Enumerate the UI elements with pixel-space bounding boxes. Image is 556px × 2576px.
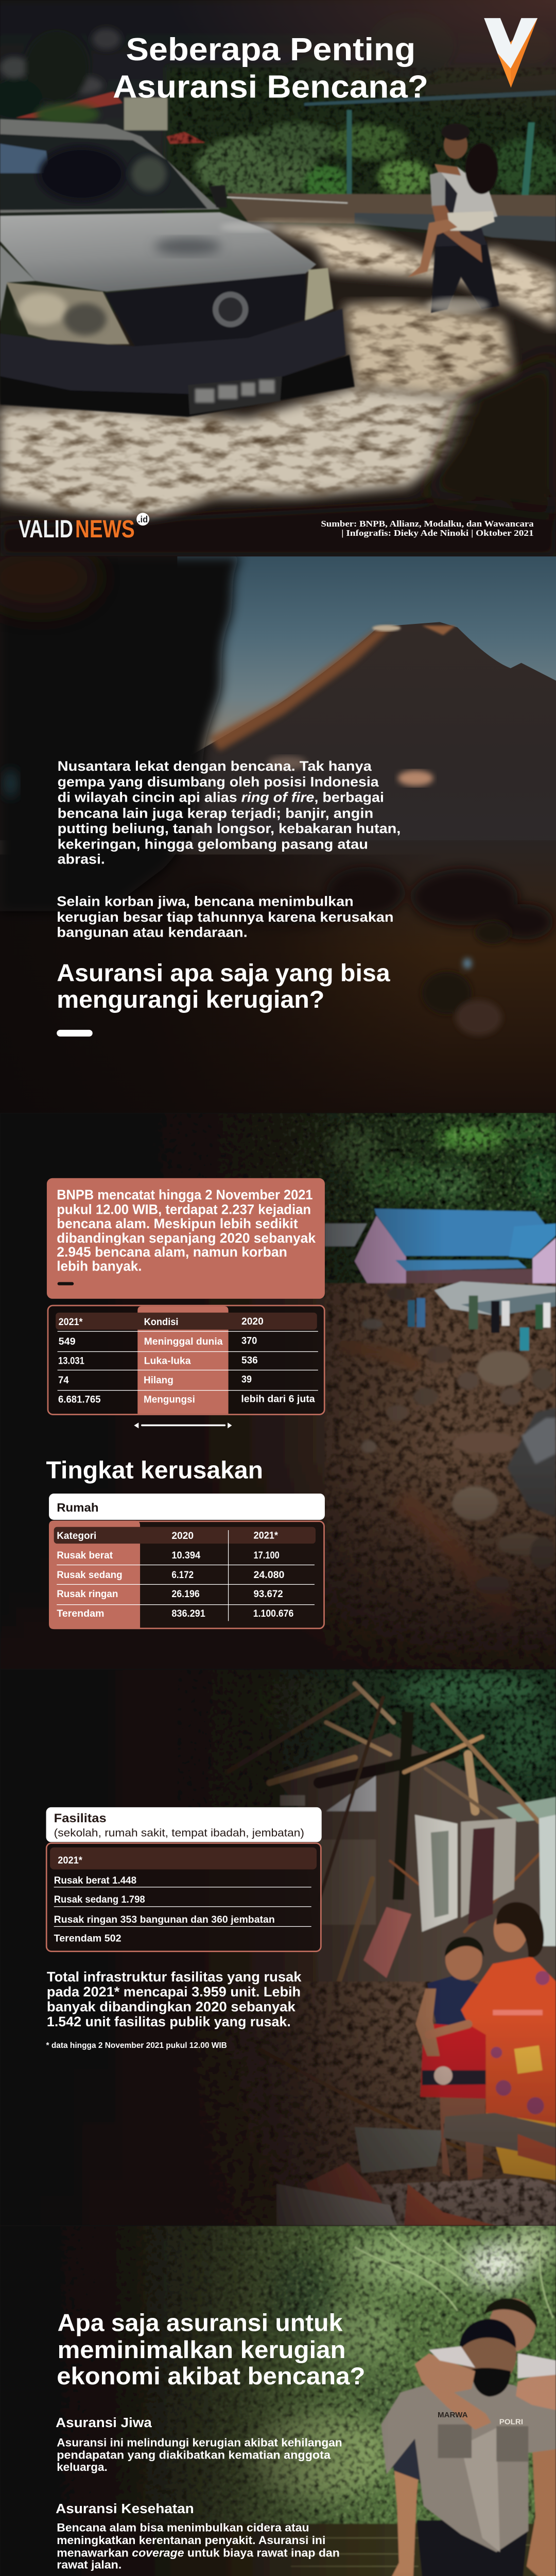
logo: VALIDNEWS.id: NEWS [75, 515, 135, 543]
photo: landslide village [0, 1113, 556, 1669]
heading: question: Asuransi apa saja yang bisa [57, 959, 391, 986]
table: damaged houses: Rusak sedang [57, 1570, 123, 1581]
table: damaged houses: 26.196 [171, 1589, 200, 1600]
intro paragraph 1: putting beliung, tanah longsor, kebakaran hutan, [58, 820, 401, 836]
table: casualties: Hilang [144, 1375, 173, 1386]
item: Asuransi Kesehatan [56, 2501, 340, 2571]
callout: BNPB summary: BNPB mencatat hingga 2 November 2021 [57, 1187, 312, 1202]
heading: insurance question [57, 2310, 365, 2389]
panel: volcano intro [0, 556, 556, 1113]
table: casualties: Meninggal dunia [144, 1336, 223, 1347]
heading: Tingkat kerusakan: Tingkat kerusakan [46, 1456, 263, 1483]
item: Asuransi Kesehatan: Bencana alam bisa menimbulkan cidera atau [57, 2521, 309, 2534]
table: damaged houses: 2021* [253, 1531, 278, 1541]
panel: damaged facilities [45, 1669, 556, 2226]
table: damaged facilities: Rusak ringan 353 bangunan dan 360 jembatan [54, 1914, 275, 1925]
item: Asuransi Kesehatan: Asuransi Kesehatan [56, 2501, 194, 2516]
photo: pickup truck [0, 119, 355, 417]
table: casualties: 13.031 [58, 1356, 84, 1367]
intro paragraph 2: Selain korban jiwa, bencana menimbulkan [57, 893, 354, 909]
item: Asuransi Jiwa: Asuransi Jiwa [56, 2415, 152, 2430]
photo: man carrying a child through floodwater [408, 124, 499, 313]
source credit: Sumber: BNPB, Allianz, Modalku, dan Wawancara [321, 519, 534, 529]
photo: policeman carrying a child through flood [0, 2226, 556, 2576]
table: damaged houses: 93.672 [253, 1589, 283, 1600]
heading: question [57, 959, 391, 1013]
text: total facilities: banyak dibandingkan 2020 sebanyak [47, 1998, 296, 2014]
callout: BNPB summary: lebih banyak. [57, 1258, 142, 1274]
accent bar [57, 1030, 93, 1037]
table: damaged houses: Kategori [57, 1531, 96, 1541]
item: Asuransi Jiwa: pendapatan yang diakibatkan kematian anggota [57, 2449, 331, 2462]
item: Asuransi Jiwa [56, 2415, 342, 2473]
table: damaged facilities: Rusak berat 1.448 [54, 1875, 136, 1886]
table: casualties: Luka-luka [144, 1356, 191, 1367]
panel: insurance types part 1 [56, 2226, 556, 2576]
text: total facilities [47, 1969, 302, 2029]
uniform name tags [438, 2411, 523, 2427]
source credit [321, 519, 534, 538]
panel: hero flood photo with title [0, 0, 556, 556]
table: damaged houses: 10.394 [171, 1550, 200, 1561]
table header: Rumah [49, 1494, 325, 1520]
intro paragraph 1: kekeringan, hingga gelombang pasang atau [58, 836, 368, 852]
heading: insurance question: meminimalkan kerugian [58, 2336, 346, 2363]
source credit: | Infografis: Dieky Ade Ninoki | Oktober 2021 [341, 528, 534, 538]
callout: BNPB summary: dibandingkan sepanjang 2020 sebanyak [57, 1230, 316, 1246]
heading: question: mengurangi kerugian? [57, 986, 324, 1013]
item: Asuransi Jiwa: keluarga. [57, 2461, 108, 2473]
logo: V mark [484, 18, 537, 88]
item: Asuransi Kesehatan: rawat jalan. [57, 2558, 121, 2571]
table: casualties: 549 [59, 1336, 76, 1347]
uniform name tags: POLRI [499, 2418, 523, 2427]
item: Asuransi Kesehatan: meningkatkan kerentanan penyakit. Asuransi ini [57, 2534, 325, 2547]
table: damaged houses: 1.100.676 [253, 1608, 294, 1619]
table header: Fasilitas [46, 1807, 322, 1842]
table: damaged houses: 24.080 [253, 1570, 284, 1581]
table: damaged houses: 17.100 [253, 1550, 280, 1561]
table: casualties: 6.681.765 [58, 1395, 101, 1405]
table: damaged houses: Terendam [57, 1608, 104, 1619]
callout: BNPB summary: bencana alam. Meskipun lebih sedikit [57, 1215, 298, 1231]
table: damaged facilities [46, 1843, 321, 1952]
text: total facilities: Total infrastruktur fasilitas yang rusak [47, 1969, 302, 1985]
table: casualties: 39 [241, 1374, 252, 1385]
table: damaged houses: 836.291 [171, 1608, 205, 1619]
title [113, 32, 428, 105]
logo: VALIDNEWS.id: .id [138, 514, 148, 524]
table: damaged houses [49, 1520, 324, 1629]
logo: VALIDNEWS.id [19, 513, 149, 543]
table: casualties: lebih dari 6 juta [241, 1394, 315, 1404]
table: damaged facilities: Rusak sedang 1.798 [54, 1894, 145, 1905]
table: damaged facilities: Terendam 502 [54, 1933, 121, 1944]
panel: landslide data [46, 1113, 556, 1669]
heading: insurance question: Apa saja asuransi untuk [58, 2310, 343, 2336]
intro paragraph 1: Nusantara lekat dengan bencana. Tak hanya [58, 758, 372, 774]
uniform name tags: MARWA [438, 2411, 468, 2419]
table: casualties: 74 [58, 1375, 69, 1386]
table: damaged houses: 6.172 [171, 1570, 194, 1581]
table: damaged houses: Rusak ringan [57, 1589, 118, 1600]
table: casualties: 536 [241, 1355, 258, 1366]
heading: insurance question: ekonomi akibat bencana? [57, 2363, 365, 2389]
title: Seberapa Penting [126, 32, 415, 67]
callout: BNPB summary: pukul 12.00 WIB, terdapat 2.237 kejadian [57, 1201, 311, 1217]
callout: BNPB summary [47, 1178, 325, 1299]
table: damaged houses: 2020 [171, 1531, 194, 1541]
table header: Fasilitas: Fasilitas [54, 1811, 107, 1825]
intro paragraph 2: bangunan atau kendaraan. [57, 924, 248, 940]
footnote: * data hingga 2 November 2021 pukul 12.00 WIB [46, 2041, 227, 2050]
photo: flooded road with pickup truck [0, 0, 556, 556]
intro paragraph 1: di wilayah cincin api alias ring of fire, berbagai [58, 789, 384, 805]
title: Asuransi Bencana? [113, 69, 428, 105]
table: casualties: 370 [241, 1335, 257, 1346]
table: casualties: 2021* [59, 1317, 83, 1328]
intro paragraph 1: abrasi. [58, 851, 105, 867]
table: casualties [48, 1306, 324, 1414]
logo: VALIDNEWS.id: VALID [19, 515, 73, 543]
table header: Fasilitas: (sekolah, rumah sakit, tempat ibadah, jembatan) [54, 1826, 304, 1839]
photo: ruined house and two girls [0, 1669, 556, 2226]
intro paragraph 2 [57, 893, 394, 940]
text: total facilities: 1.542 unit fasilitas publik yang rusak. [47, 2013, 291, 2029]
table: casualties: Mengungsi [144, 1395, 195, 1405]
intro paragraph 1 [58, 758, 401, 867]
arrow: scroll indicator [134, 1422, 232, 1428]
table: damaged facilities: 2021* [58, 1855, 82, 1866]
intro paragraph 1: gempa yang disumbang oleh posisi Indonesia [58, 773, 379, 789]
table: casualties: 2020 [241, 1316, 264, 1327]
table header: Rumah: Rumah [57, 1501, 98, 1514]
item: Asuransi Jiwa: Asuransi ini melindungi kerugian akibat kehilangan [57, 2436, 342, 2449]
table: casualties: Kondisi [144, 1317, 178, 1328]
photo: volcano at dusk [0, 542, 556, 1113]
text: total facilities: pada 2021* mencapai 3.959 unit. Lebih [47, 1984, 301, 1999]
callout: BNPB summary: 2.945 bencana alam, namun korban [57, 1244, 287, 1260]
intro paragraph 1: bencana lain juga kerap terjadi; banjir, angin [58, 805, 373, 821]
item: Asuransi Kesehatan: menawarkan coverage untuk biaya rawat inap dan [57, 2547, 340, 2560]
intro paragraph 2: kerugian besar tiap tahunnya karena kerusakan [57, 909, 394, 925]
table: damaged houses: Rusak berat [57, 1550, 113, 1561]
